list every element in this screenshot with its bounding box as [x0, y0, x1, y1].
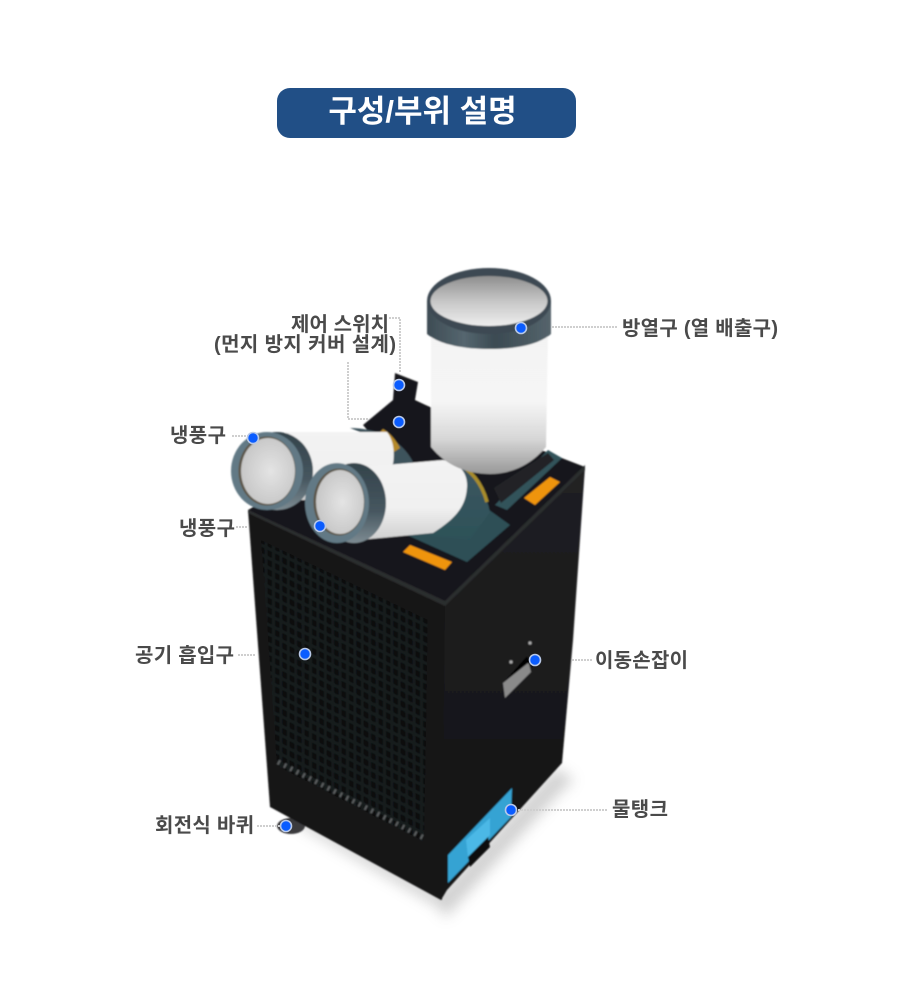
top face: [248, 405, 585, 605]
mesh bottom ticks: [278, 762, 424, 838]
exhaust duct: [427, 268, 551, 474]
left face: [248, 510, 445, 900]
caster wheel: [277, 818, 305, 834]
air conditioner unit: [231, 268, 585, 900]
lower cold air ring: [305, 463, 386, 543]
title: [277, 88, 576, 138]
upper cold air ring: [231, 432, 313, 510]
exhaust base plate: [495, 450, 562, 510]
front corner: [424, 597, 447, 900]
label: cold air outlet 2: 냉풍구: [179, 517, 235, 540]
leader lines: [232, 318, 617, 826]
lower cold air duct: [352, 460, 467, 540]
label: cold air outlet 1: 냉풍구: [170, 424, 226, 447]
label: swivel wheel: 회전식 바퀴: [155, 814, 254, 837]
upper cold air duct: [285, 432, 394, 500]
label: air intake: 공기 흡입구: [135, 644, 234, 667]
air intake mesh: [261, 540, 428, 842]
marker dots: [248, 322, 540, 832]
label: control switch: 제어 스위치: [291, 313, 389, 336]
right face: [441, 467, 585, 900]
carry handle: [503, 641, 533, 698]
warning sticker right: [524, 477, 560, 505]
lower duct base plate: [407, 507, 510, 562]
label: water tank: 물탱크: [612, 798, 668, 821]
warning sticker left: [403, 545, 452, 570]
label: heat exhaust: 방열구 (열 배출구): [622, 317, 778, 340]
title: 구성/부위 설명: [328, 94, 517, 129]
label: carry handle: 이동손잡이: [595, 649, 688, 672]
lower duct elbow: [430, 460, 490, 540]
water tank: [448, 788, 512, 883]
label: dust cover: (먼지 방지 커버 설계): [214, 333, 396, 356]
control bracket: [363, 373, 432, 470]
upper flange stripe: [378, 429, 400, 452]
upper cold air flange: [350, 428, 413, 470]
elbow stripe: [455, 462, 487, 502]
floor shadow: [300, 768, 574, 918]
